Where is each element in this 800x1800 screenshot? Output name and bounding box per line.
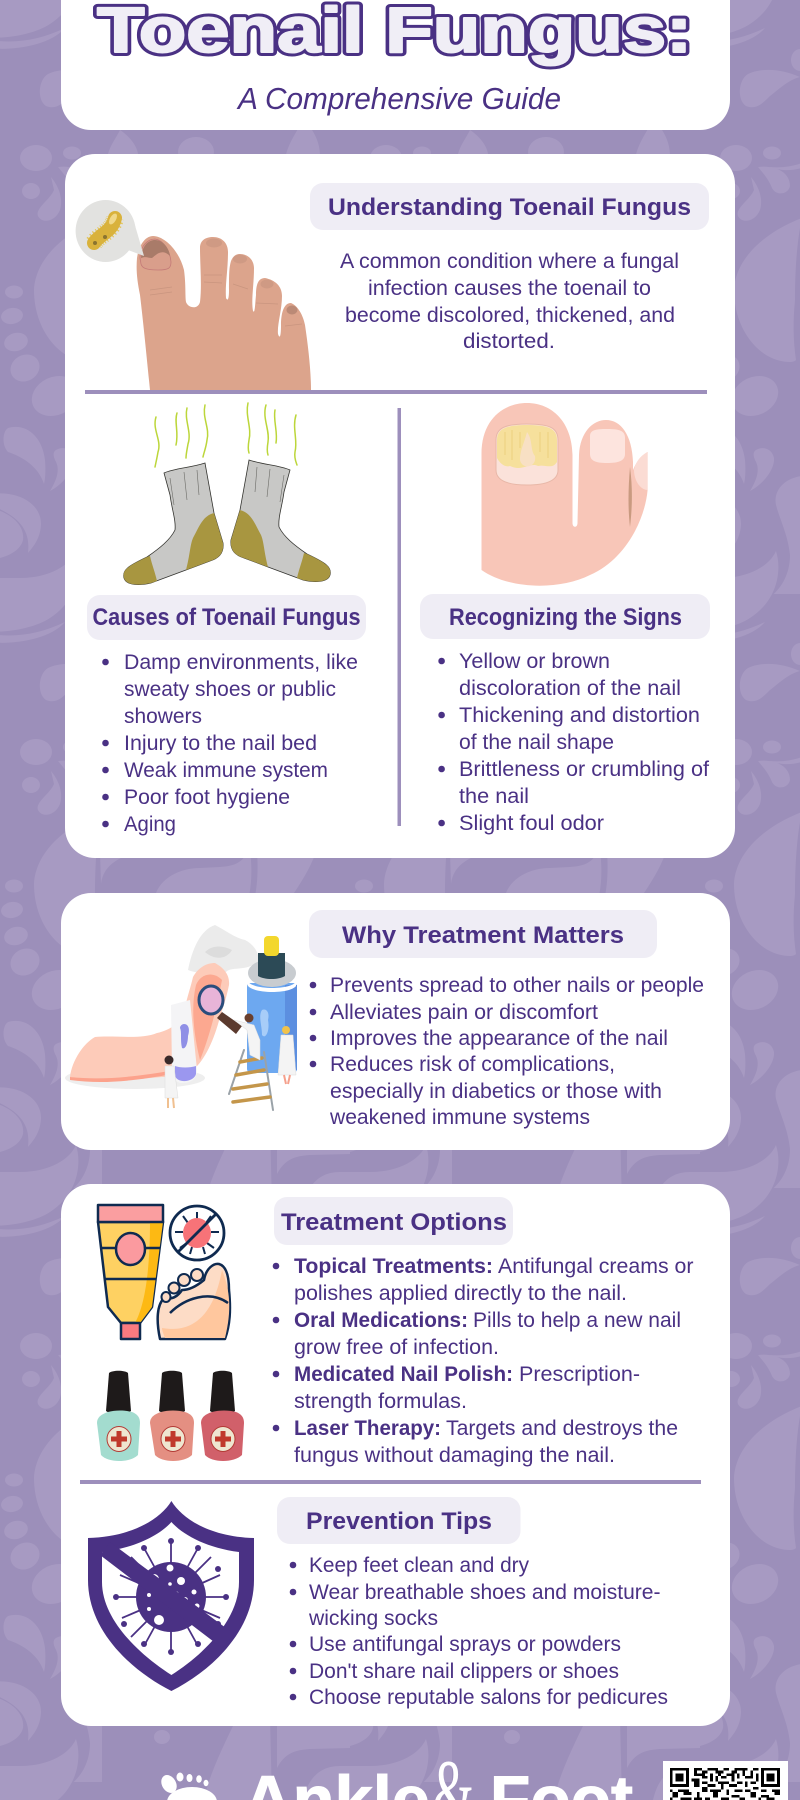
list: treatment benefits: weakened immune systems: [329, 1106, 590, 1129]
icon: doctor at tube: [164, 1056, 178, 1108]
icon: foot with infected nail: [76, 200, 311, 390]
icon: foot treatment illustration: [65, 925, 297, 1110]
list: treatment benefits: Prevents spread to other nails or people: [330, 974, 704, 997]
icon: spray can: [247, 936, 297, 1073]
list: causes: Weak immune system: [124, 759, 328, 782]
icon: toes with discolored nail: [481, 403, 648, 586]
pill heading: why treatment matters: Why Treatment Matters: [342, 922, 624, 949]
icon: doctor on ladder: [234, 1014, 260, 1060]
icon: ladder: [229, 1050, 273, 1110]
text: definition: distorted.: [463, 330, 555, 353]
list: prevention tips: Don't share nail clippers or shoes: [309, 1660, 619, 1683]
list: treatment options: grow free of infection.: [294, 1336, 499, 1359]
list: causes: Poor foot hygiene: [124, 786, 290, 809]
panel: title header: [61, 0, 730, 130]
list: treatment benefits: [310, 974, 704, 1129]
icon: smelly socks: [124, 403, 330, 585]
text: definition: become discolored, thickened, and: [345, 304, 675, 327]
pill heading: signs: Recognizing the Signs: [449, 604, 682, 631]
list: prevention tips: Wear breathable shoes and moisture-: [309, 1581, 660, 1604]
icon: no fungus sign: [170, 1206, 224, 1260]
list: treatment options: Laser Therapy:: [294, 1417, 441, 1440]
pill heading: why treatment matters: [309, 910, 657, 958]
list: treatment benefits: Alleviates pain or discomfort: [330, 1001, 598, 1024]
pill heading: causes: Causes of Toenail Fungus: [92, 604, 360, 631]
list: treatment options: Topical Treatments:: [294, 1255, 493, 1278]
list: prevention tips: Use antifungal sprays or powders: [309, 1633, 621, 1656]
list: signs: Slight foul odor: [459, 812, 604, 835]
pill heading: prevention tips: Prevention Tips: [306, 1508, 492, 1535]
icon: doctor standing: [278, 1026, 296, 1084]
list: treatment options: strength formulas.: [294, 1390, 467, 1413]
list: treatment options: Targets and destroys the: [446, 1417, 678, 1440]
pill heading: prevention tips: [277, 1497, 520, 1544]
list: treatment options: Medicated Nail Polish:: [294, 1363, 513, 1386]
icon: foot sole: [158, 1264, 230, 1339]
list: treatment benefits: especially in diabetics or those with: [330, 1080, 662, 1103]
list: treatment benefits: Reduces risk of complications,: [330, 1053, 615, 1076]
pill heading: signs: [420, 594, 710, 639]
list: prevention tips: Choose reputable salons for pedicures: [309, 1686, 668, 1709]
list: signs: Yellow or brown: [459, 650, 610, 673]
icon: antifungal cream tube: [98, 1205, 163, 1339]
list: prevention tips: Keep feet clean and dry: [309, 1554, 529, 1577]
logo: Ankle & Foot: [158, 1740, 633, 1800]
pill heading: treatment options: Treatment Options: [281, 1209, 507, 1236]
list: signs: discoloration of the nail: [459, 677, 681, 700]
list: prevention tips: [290, 1554, 668, 1709]
list: prevention tips: wicking socks: [308, 1607, 438, 1630]
list: causes: showers: [124, 705, 202, 728]
panel: why treatment matters: [61, 893, 730, 1150]
icon: red bottle: [201, 1371, 244, 1461]
list: treatment options: Antifungal creams or: [498, 1255, 694, 1278]
list: signs: the nail: [459, 785, 529, 808]
icon: odor lines: [155, 403, 297, 467]
list: signs: [438, 650, 709, 835]
icon: speech bubble with bacterium: [76, 200, 144, 262]
panel: treatment options and prevention: [61, 1184, 730, 1726]
pill heading: understanding toenail fungus: Understanding Toenail Fungus: [328, 194, 691, 221]
list: signs: of the nail shape: [459, 731, 614, 754]
list: treatment options: polishes applied directly to the nail.: [294, 1282, 627, 1305]
list: causes: Injury to the nail bed: [124, 732, 317, 755]
text: definition: [340, 250, 679, 353]
icon: salmon bottle: [150, 1371, 194, 1461]
pill heading: causes: [87, 595, 366, 640]
subtitle: A Comprehensive Guide: [236, 81, 561, 116]
icon: footprint: [158, 1772, 217, 1800]
list: treatment options: Prescription-: [519, 1363, 640, 1386]
list: treatment options: fungus without damaging the nail.: [294, 1444, 615, 1467]
icon: magnifier: [199, 986, 242, 1034]
pill heading: understanding toenail fungus: [310, 183, 709, 230]
list: treatment options: Pills to help a new nail: [473, 1309, 681, 1332]
text: definition: infection causes the toenail to: [368, 277, 651, 300]
list: signs: Thickening and distortion: [459, 704, 700, 727]
icon: virus: [113, 1538, 229, 1655]
list: causes: Aging: [124, 813, 176, 836]
list: causes: Damp environments, like: [124, 651, 358, 674]
list: causes: [102, 651, 358, 836]
QR code: [663, 1761, 788, 1800]
list: treatment options: Oral Medications:: [294, 1309, 468, 1332]
list: causes: sweaty shoes or public: [124, 678, 336, 701]
icon: medicated nail polish bottles: [97, 1371, 244, 1461]
icon: teal bottle: [97, 1371, 140, 1461]
text: definition: A common condition where a fungal: [340, 250, 679, 273]
pill heading: treatment options: [274, 1197, 513, 1245]
icon: shield with virus: [88, 1501, 254, 1691]
panel: understanding, causes, signs: [65, 154, 735, 858]
list: treatment benefits: Improves the appearance of the nail: [330, 1027, 668, 1050]
list: signs: Brittleness or crumbling of: [459, 758, 709, 781]
list: treatment options: [273, 1255, 694, 1467]
